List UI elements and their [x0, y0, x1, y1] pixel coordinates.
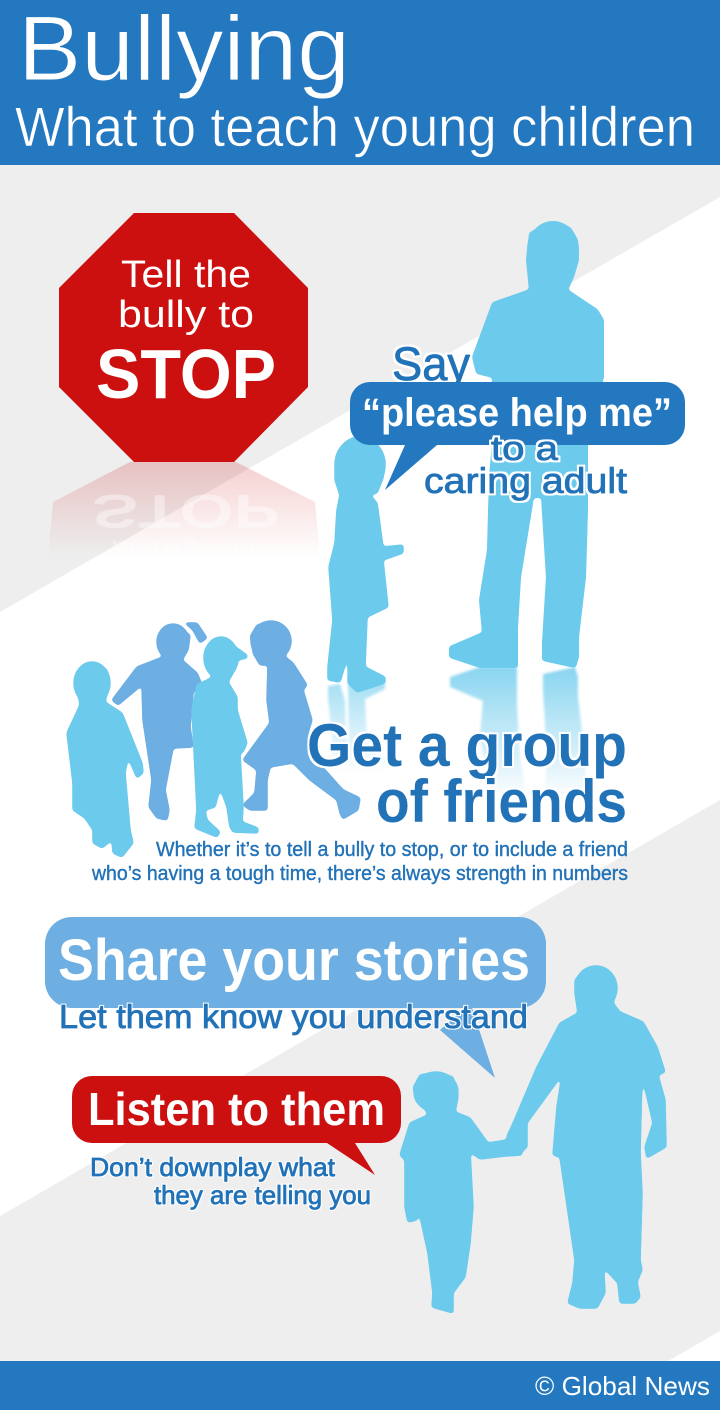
callout: listen to them: [72, 1076, 401, 1210]
subtitle: What to teach young children: [15, 95, 695, 158]
stop sign: [59, 213, 308, 462]
callout: share your stories: Let them know you understand: [59, 998, 528, 1035]
callout: share your stories: [45, 917, 546, 1078]
child running: [243, 621, 360, 819]
stop sign text: bully to: [118, 294, 254, 336]
footer banner: [0, 1361, 720, 1410]
boy: [400, 1072, 522, 1313]
silhouette: man holding child's hand: [400, 966, 666, 1313]
silhouettes: group of children: [67, 621, 360, 857]
text: strength in numbers: who’s having a tough time, there’s always strength in numbers: [91, 863, 628, 885]
stop sign reflection: [48, 462, 320, 561]
heading: get a group of friends: [307, 712, 627, 835]
text: strength in numbers: Whether it’s to tell a bully to stop, or to include a friend: [156, 839, 628, 861]
heading: get a group of friends: of friends: [376, 768, 627, 835]
child with cap: [192, 637, 258, 837]
stop sign text: [96, 254, 276, 413]
text: strength in numbers: [91, 839, 628, 885]
callout: listen to them: Don’t downplay what: [90, 1152, 336, 1182]
callout: say please help me: [350, 337, 685, 501]
man: [507, 966, 666, 1308]
stop sign reflection: STOP: [92, 485, 280, 538]
joined hands: [507, 1126, 527, 1154]
stop sign reflection: bully to: [110, 536, 257, 561]
title: Bullying: [18, 0, 350, 100]
speech bubble: [72, 1076, 401, 1175]
speech bubble: [350, 382, 685, 490]
speech bubble: [45, 917, 546, 1078]
callout: listen to them: Listen to them: [88, 1083, 385, 1135]
callout: say please help me: to a: [491, 430, 558, 468]
stop sign text: Tell the: [121, 254, 251, 296]
callout: say please help me: caring adult: [424, 460, 627, 501]
callout: share your stories: Share your stories: [58, 928, 530, 993]
credit: © Global News: [535, 1371, 710, 1401]
stop sign text: STOP: [96, 335, 276, 413]
child with pigtail: [112, 623, 207, 820]
heading: get a group of friends: Get a group: [307, 712, 627, 779]
callout: listen to them: they are telling you: [154, 1180, 371, 1210]
callout: say please help me: “please help me”: [362, 391, 672, 435]
child on left: [67, 662, 143, 857]
callout: say please help me: Say: [392, 337, 470, 390]
silhouette: adult: [450, 222, 603, 1112]
header banner: [0, 0, 720, 165]
silhouette: small girl: [328, 437, 403, 929]
